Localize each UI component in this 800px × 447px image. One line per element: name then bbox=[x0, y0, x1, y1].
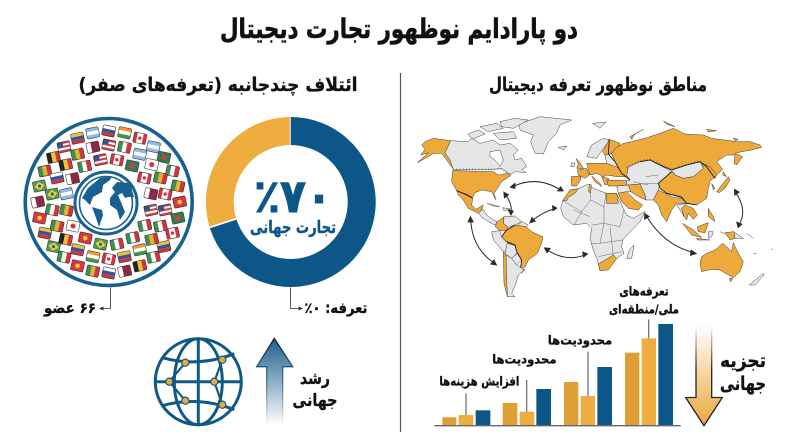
label: global fragmentation: جهانی bbox=[720, 373, 766, 395]
heading: multilateral coalition: ائتلاف چندجانبه (تعرفه‌های صفر) bbox=[78, 74, 358, 96]
label: national/regional tariffs: ملی/منطقه‌ای bbox=[609, 301, 679, 316]
label: restrictions 1: محدودیت‌ها bbox=[492, 351, 556, 366]
grey countries bbox=[445, 117, 773, 297]
label: rising costs: افزایش هزینه‌ها bbox=[439, 374, 519, 389]
title: دو پارادایم نوظهور تجارت دیجیتال bbox=[220, 14, 578, 45]
world map bbox=[417, 117, 773, 297]
arrow: Pacific bbox=[467, 216, 497, 266]
arrow: N. America to S. America bbox=[503, 191, 514, 216]
trade arrows bbox=[467, 182, 743, 266]
label: global fragmentation: تجزیه bbox=[720, 350, 766, 372]
label: global growth: جهانی bbox=[292, 391, 338, 411]
callout: tariff 0%: تعرفه: ۰٪ bbox=[304, 299, 368, 317]
donut value: ٪۷۰ bbox=[254, 169, 332, 223]
icon: center globe bbox=[75, 172, 137, 234]
arrow: S. America to Africa bbox=[529, 205, 558, 224]
group 4 bars bbox=[625, 324, 673, 426]
donut caption: تجارت جهانی bbox=[250, 218, 336, 238]
icon: connected globe bbox=[155, 339, 241, 425]
group 1 bars bbox=[442, 410, 490, 426]
arrow: global growth up bbox=[257, 338, 293, 425]
label: global fragmentation bbox=[720, 350, 766, 395]
heading: emerging tariff regions: مناطق نوظهور تعرفه دیجیتال bbox=[489, 74, 707, 96]
donut chart: 70% of world trade bbox=[206, 117, 376, 287]
flag circle: 66 members bbox=[25, 118, 192, 286]
arrow: N. America to Africa bbox=[509, 182, 564, 191]
dark border lines bbox=[457, 139, 715, 267]
arrow: Indian Ocean bbox=[644, 213, 697, 256]
orange countries bbox=[417, 121, 762, 297]
arrow: S. Atlantic bbox=[544, 247, 588, 258]
group 3 bars bbox=[564, 367, 612, 426]
label: national/regional tariffs bbox=[609, 284, 679, 316]
label: global growth: رشد bbox=[300, 369, 330, 389]
label: restrictions 2: محدودیت‌ها bbox=[548, 333, 612, 348]
arrow: global fragmentation down bbox=[686, 325, 722, 426]
label: national/regional tariffs: تعرفه‌های bbox=[619, 284, 669, 299]
label: global growth bbox=[292, 369, 338, 411]
callout: 66 members: ۶۶ عضو bbox=[43, 299, 96, 317]
group 2 bars bbox=[503, 389, 551, 426]
callout: 66 members bbox=[43, 288, 110, 317]
bar chart: global fragmentation bbox=[434, 284, 681, 426]
flags ring bbox=[30, 125, 187, 279]
callout: tariff 0% bbox=[290, 288, 368, 317]
arrow: W. Pacific bbox=[734, 189, 743, 228]
